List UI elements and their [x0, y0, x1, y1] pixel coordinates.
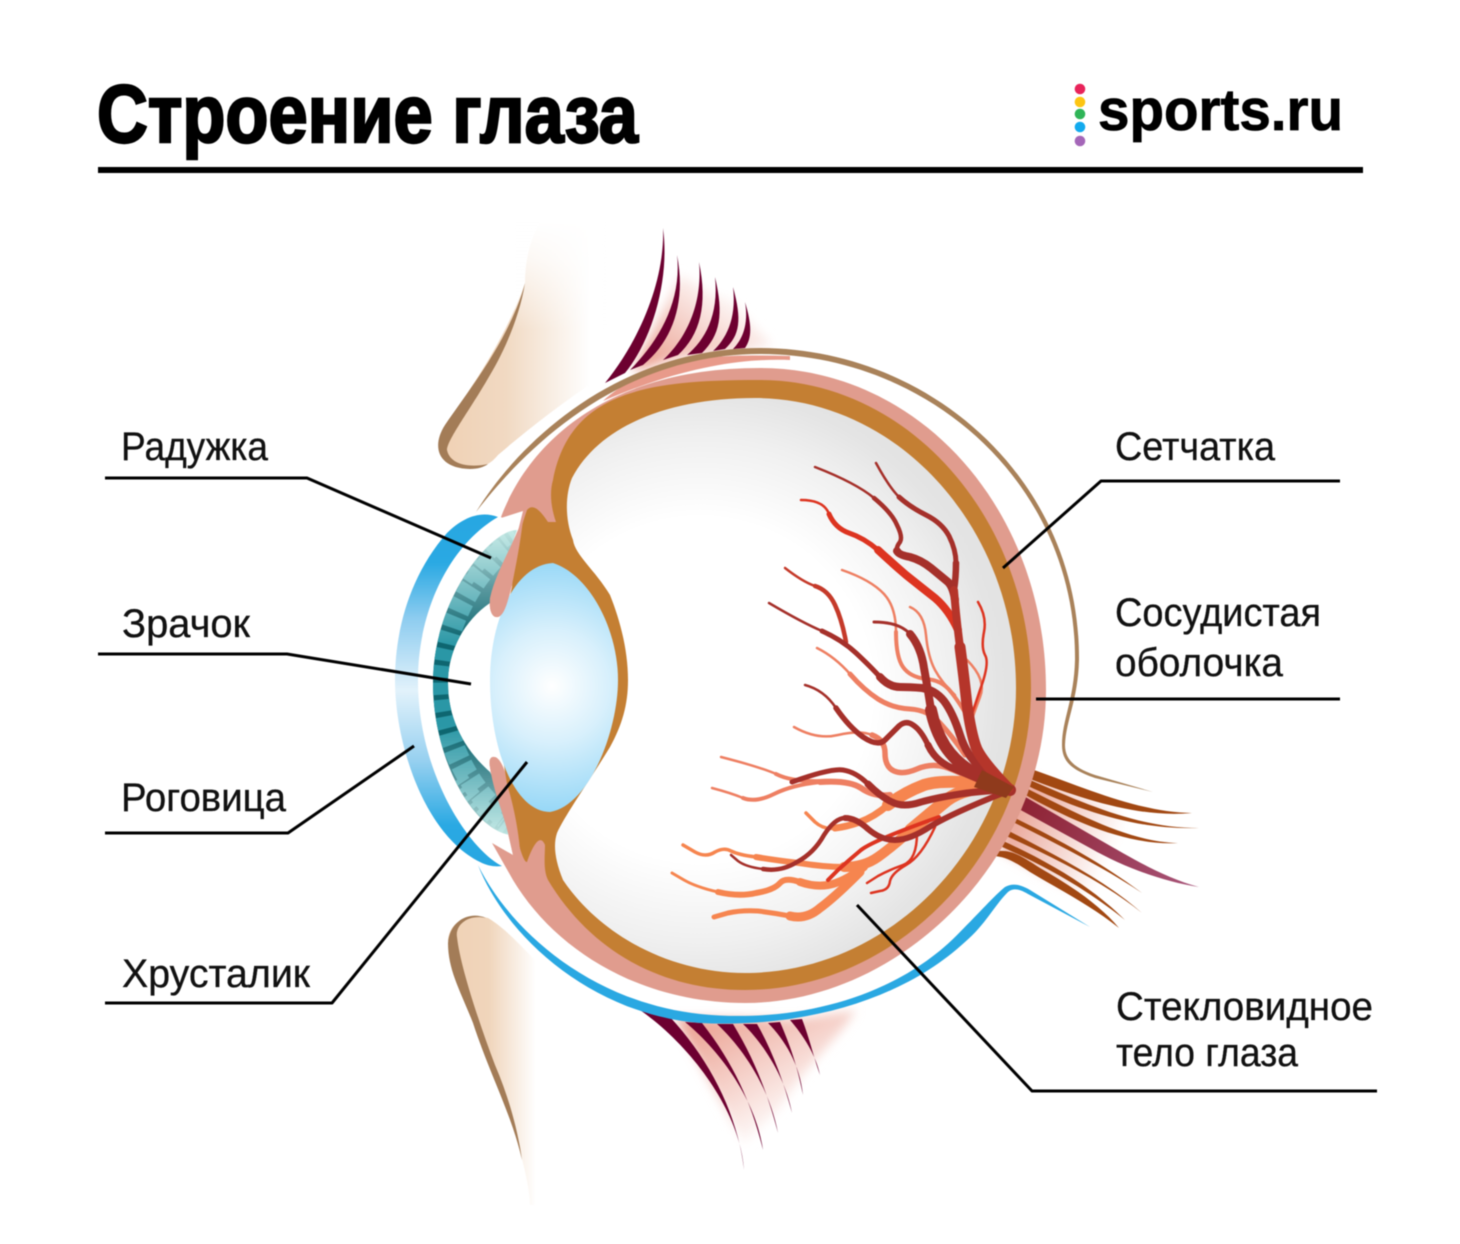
label: Зрачок: Зрачок: [122, 602, 250, 646]
label: Хрусталик: Хрусталик: [122, 952, 310, 996]
vessel: main stem: [954, 590, 1008, 788]
eye: iris: [433, 530, 517, 835]
label: Сосудистая оболочка: Сосудистая: [1115, 591, 1321, 635]
label: Стекловидное тело глаза: тело глаза: [1116, 1031, 1299, 1075]
vessels: dark branches: [731, 463, 1010, 870]
eye: iris root spikes over the lens: [489, 520, 523, 855]
label: Роговица: [105, 746, 414, 833]
vessel root: [974, 770, 1014, 798]
eye: vitreous body: [555, 398, 1016, 973]
vessels: red branches: [801, 500, 987, 893]
vessels: orange branches: [672, 782, 1000, 917]
label: Хрусталик: [105, 762, 527, 1003]
eye: cornea: [395, 514, 502, 866]
label: Сосудистая оболочка: оболочка: [1115, 641, 1284, 685]
retinal blood vessels: [672, 463, 1014, 917]
label: Радужка: [105, 425, 491, 558]
label: Стекловидное тело глаза: [857, 905, 1377, 1091]
label: Зрачок: [98, 602, 471, 684]
eye: retina (orange): [490, 380, 1031, 990]
eye: lens: [490, 563, 618, 812]
vessels: mid red branches: [785, 568, 846, 642]
eye: white wedge at iris root: [501, 511, 523, 531]
upper eye muscles: [605, 228, 772, 383]
lower eye muscles: [640, 1010, 856, 1170]
label: Радужка: Радужка: [121, 425, 269, 469]
label: Роговица: Роговица: [121, 776, 287, 820]
title: Строение глаза: [97, 69, 639, 160]
eye: lower blue membrane: [478, 865, 1090, 1024]
label: Сетчатка: [1003, 425, 1340, 568]
label: Сетчатка: Сетчатка: [1115, 425, 1276, 469]
label: Сосудистая оболочка: [1036, 591, 1340, 699]
upper orbital bone: [438, 220, 607, 469]
vessels: salmon branches: [712, 570, 985, 800]
optic nerve bundle: [992, 770, 1199, 928]
label: Стекловидное тело глаза: Стекловидное: [1116, 985, 1373, 1029]
lower orbital bone: [448, 916, 535, 1205]
logo: sports.ru: sports.ru: [1098, 78, 1343, 143]
eye: vascular layer (pink): [489, 368, 1046, 1003]
eye: outer brown membrane: [476, 348, 1153, 792]
